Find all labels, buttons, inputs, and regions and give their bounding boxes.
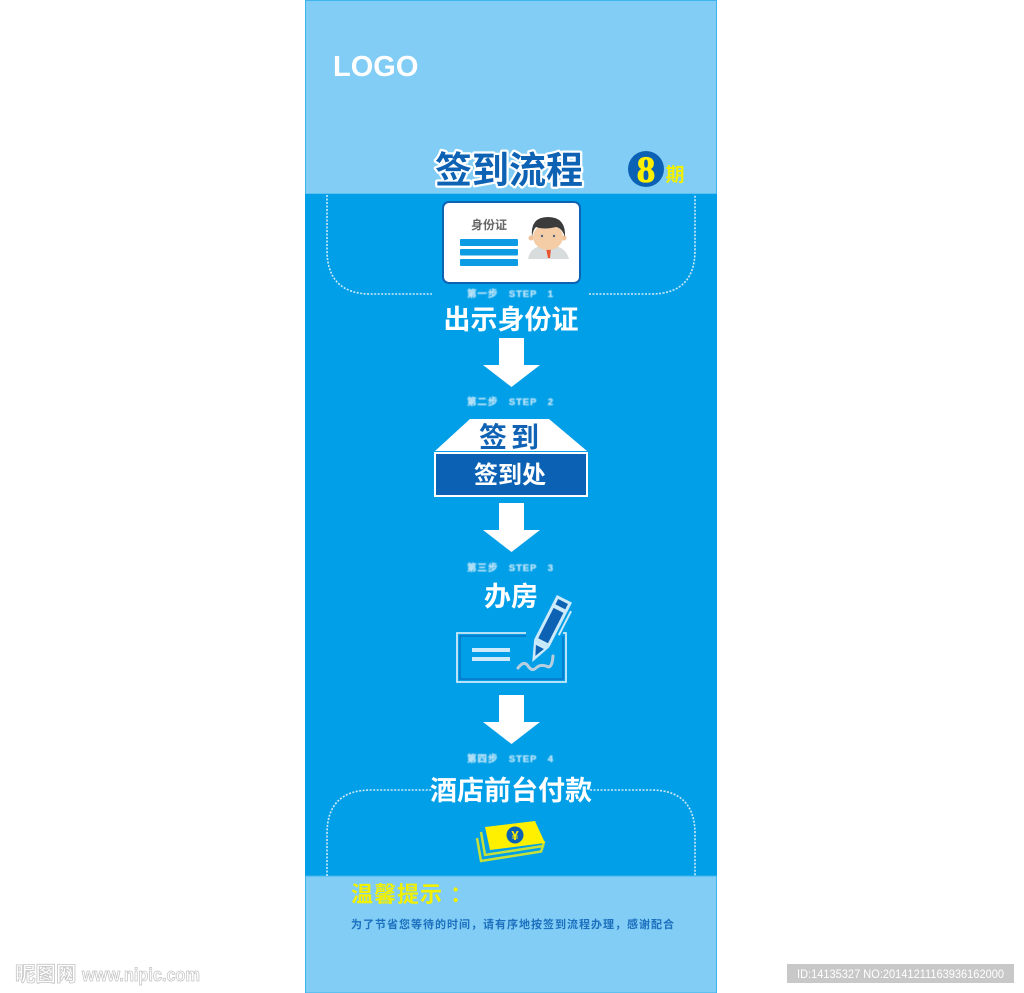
step 3 label: 第三步 STEP 3	[467, 562, 553, 574]
arrow 2	[483, 503, 540, 552]
badge: 8 period: 期	[665, 164, 685, 186]
watermark: site name	[15, 963, 200, 986]
icon: yuan banknotes: ¥	[511, 828, 519, 843]
pen	[525, 595, 575, 667]
step 4 label: 第四步 STEP 4	[467, 753, 554, 765]
card text lines	[460, 239, 518, 266]
icon: signing form with pen	[457, 595, 575, 682]
title: 签到流程	[435, 150, 583, 191]
panel: main blue body	[305, 194, 717, 876]
tip text: 为了节省您等待的时间，请有序地按签到流程办理，感谢配合	[351, 917, 674, 931]
panel: bottom tip band	[306, 876, 716, 993]
card label: 身份证	[471, 217, 507, 232]
arrow 1	[483, 338, 540, 387]
icon: ID card	[443, 202, 580, 283]
panel: top header band	[306, 0, 716, 194]
step 1 heading: 出示身份证	[444, 305, 578, 335]
badge: 8 period: 8	[637, 150, 655, 191]
dashed frame: top	[327, 195, 695, 294]
desk top text: 签到	[479, 422, 543, 453]
arrow 3	[483, 695, 540, 744]
step 1 label: 第一步 STEP 1	[467, 288, 554, 300]
step 3 heading: 办房	[484, 582, 538, 612]
icon: yuan banknotes	[477, 821, 545, 861]
step 4 heading: 酒店前台付款	[430, 775, 592, 806]
desk sign text: 签到处	[474, 462, 546, 489]
dashed frame: bottom	[327, 790, 695, 876]
watermark: site name: www.nipic.com	[81, 965, 200, 985]
watermark: image id	[787, 964, 1014, 983]
watermark: site name: 昵图网	[15, 963, 76, 986]
badge: 8 period	[628, 150, 685, 191]
tip heading: 温馨提示 ：	[351, 882, 473, 907]
logo: LOGO	[333, 51, 418, 83]
portrait	[528, 217, 569, 259]
icon: sign-in desk	[435, 419, 587, 496]
watermark: image id: ID:14135327 NO:20141211163936162000	[797, 967, 1004, 981]
step 2 label: 第二步 STEP 2	[467, 396, 553, 408]
